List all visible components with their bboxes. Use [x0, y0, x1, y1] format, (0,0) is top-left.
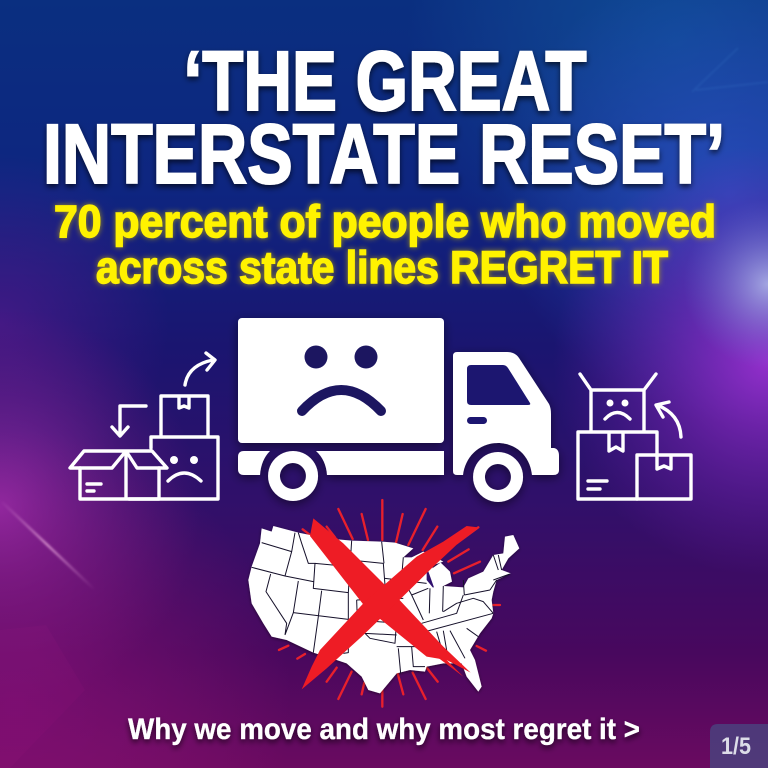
footer call to action: Why we move and why most regret it > — [128, 713, 640, 746]
page badge — [710, 724, 768, 768]
title: ‘THE GREAT — [184, 34, 586, 128]
icon: right boxes with sad face — [578, 374, 691, 499]
truck cargo box with sad face — [238, 318, 444, 443]
truck cab — [453, 352, 559, 475]
small box — [637, 455, 691, 499]
big box — [578, 432, 657, 499]
icon: sad moving truck — [238, 318, 559, 502]
subtitle: across state lines REGRET IT — [96, 242, 668, 293]
page badge: 1/5 — [721, 733, 751, 760]
open box — [80, 452, 159, 499]
truck chassis — [238, 451, 444, 475]
subtitle — [54, 196, 716, 293]
arrow — [656, 402, 681, 437]
title — [43, 34, 725, 201]
state borders — [252, 533, 510, 673]
red X — [302, 518, 478, 689]
truck wheels — [268, 451, 523, 502]
red burst rays — [279, 500, 500, 707]
arrow up right — [185, 353, 215, 385]
arrow down left — [112, 406, 146, 436]
sad box — [580, 374, 656, 431]
US outline — [248, 526, 519, 693]
subtitle: 70 percent of people who moved — [54, 196, 716, 247]
icon: left boxes with sad face — [70, 353, 218, 499]
sad box — [129, 437, 218, 499]
map: crossed-out USA — [248, 500, 519, 707]
top box — [161, 396, 208, 436]
